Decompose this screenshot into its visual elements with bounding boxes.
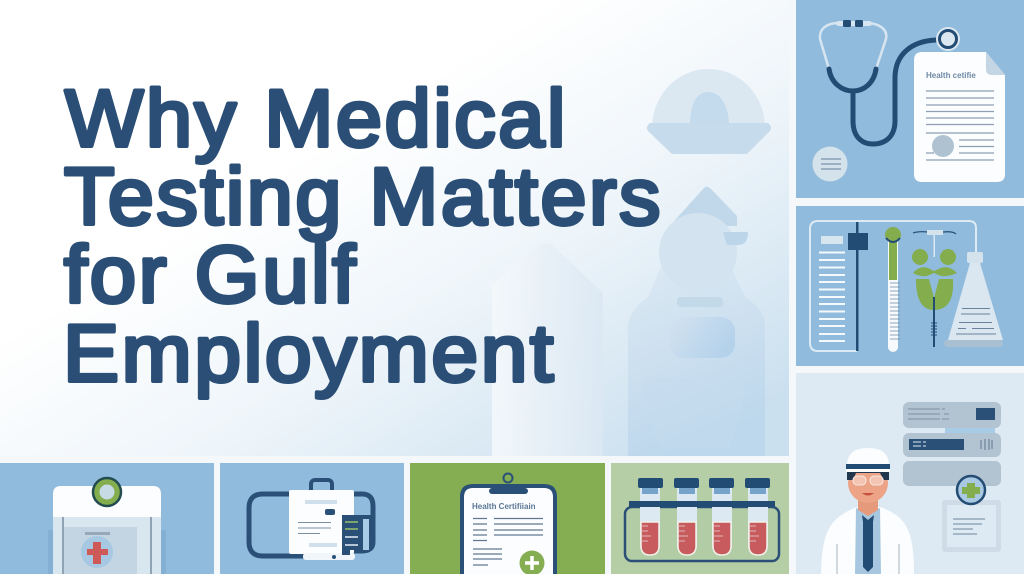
panel: laboratory equipment bbox=[796, 206, 1024, 366]
icon: faded building silhouette bbox=[492, 243, 603, 456]
title: Testing Matters bbox=[64, 152, 663, 242]
title bbox=[63, 74, 663, 399]
lab frame and chart bbox=[810, 221, 976, 351]
panel: health certificate clipboard bbox=[410, 463, 605, 574]
icon: conical flask bbox=[944, 252, 1003, 347]
icon: round note badge bbox=[812, 146, 848, 182]
icon: tube 2 bbox=[674, 478, 699, 555]
icon: server stack bbox=[903, 402, 1001, 486]
icon: green organ diagram bbox=[912, 230, 957, 347]
panel: main title background bbox=[0, 0, 789, 456]
title: for Gulf bbox=[64, 230, 358, 320]
title: Why Medical bbox=[65, 74, 568, 164]
icon: tube 3 bbox=[709, 478, 734, 555]
icon: stethoscope bbox=[820, 20, 959, 144]
panel: stethoscope and health certificate bbox=[796, 0, 1024, 198]
panel: blood test tubes bbox=[611, 463, 789, 574]
icon: record with green cross badge bbox=[942, 476, 1001, 552]
icon: green seal bbox=[93, 478, 121, 506]
icon: tube 4 bbox=[745, 478, 770, 555]
panel: health certificate clipboard: Health Certifiiain bbox=[472, 502, 536, 511]
icon: tube 1 bbox=[638, 478, 663, 555]
icon: certificate document bbox=[914, 52, 1005, 182]
panel: medical cabinet bbox=[0, 463, 214, 574]
icon: green plus bbox=[520, 550, 544, 574]
icon: certificate document: Health cetifie bbox=[926, 71, 976, 80]
panel: doctor and records bbox=[796, 373, 1024, 574]
icon: inner tablet bbox=[342, 515, 371, 555]
icon: faded hard hat bbox=[647, 69, 771, 154]
icon: faded worker silhouette bbox=[628, 187, 765, 456]
title: Employment bbox=[63, 309, 556, 399]
icon: doctor bbox=[821, 448, 914, 574]
icon: thermometer test tube bbox=[885, 227, 901, 352]
panel: medical case bbox=[220, 463, 404, 574]
